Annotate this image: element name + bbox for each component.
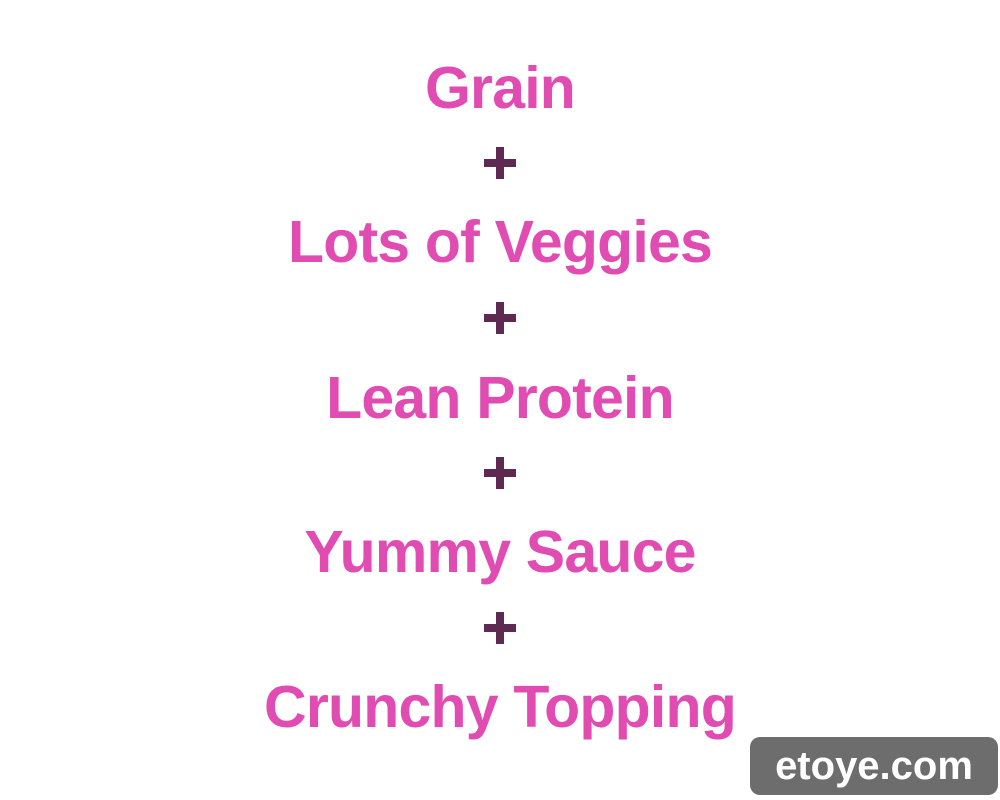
watermark <box>750 737 998 795</box>
heading: Grain: Grain <box>425 55 575 121</box>
heading: Yummy Sauce: Yummy Sauce <box>304 519 696 585</box>
icon: plus 2 <box>484 302 516 334</box>
heading: Lean Protein: Lean Protein <box>326 365 674 431</box>
heading: Crunchy Topping: Crunchy Topping <box>264 674 736 740</box>
watermark: etoye.com <box>775 744 973 788</box>
icon: plus 3 <box>484 457 516 489</box>
icon: plus 1 <box>484 147 516 179</box>
icon: plus 4 <box>484 612 516 644</box>
heading: Lots of Veggies: Lots of Veggies <box>288 209 712 275</box>
